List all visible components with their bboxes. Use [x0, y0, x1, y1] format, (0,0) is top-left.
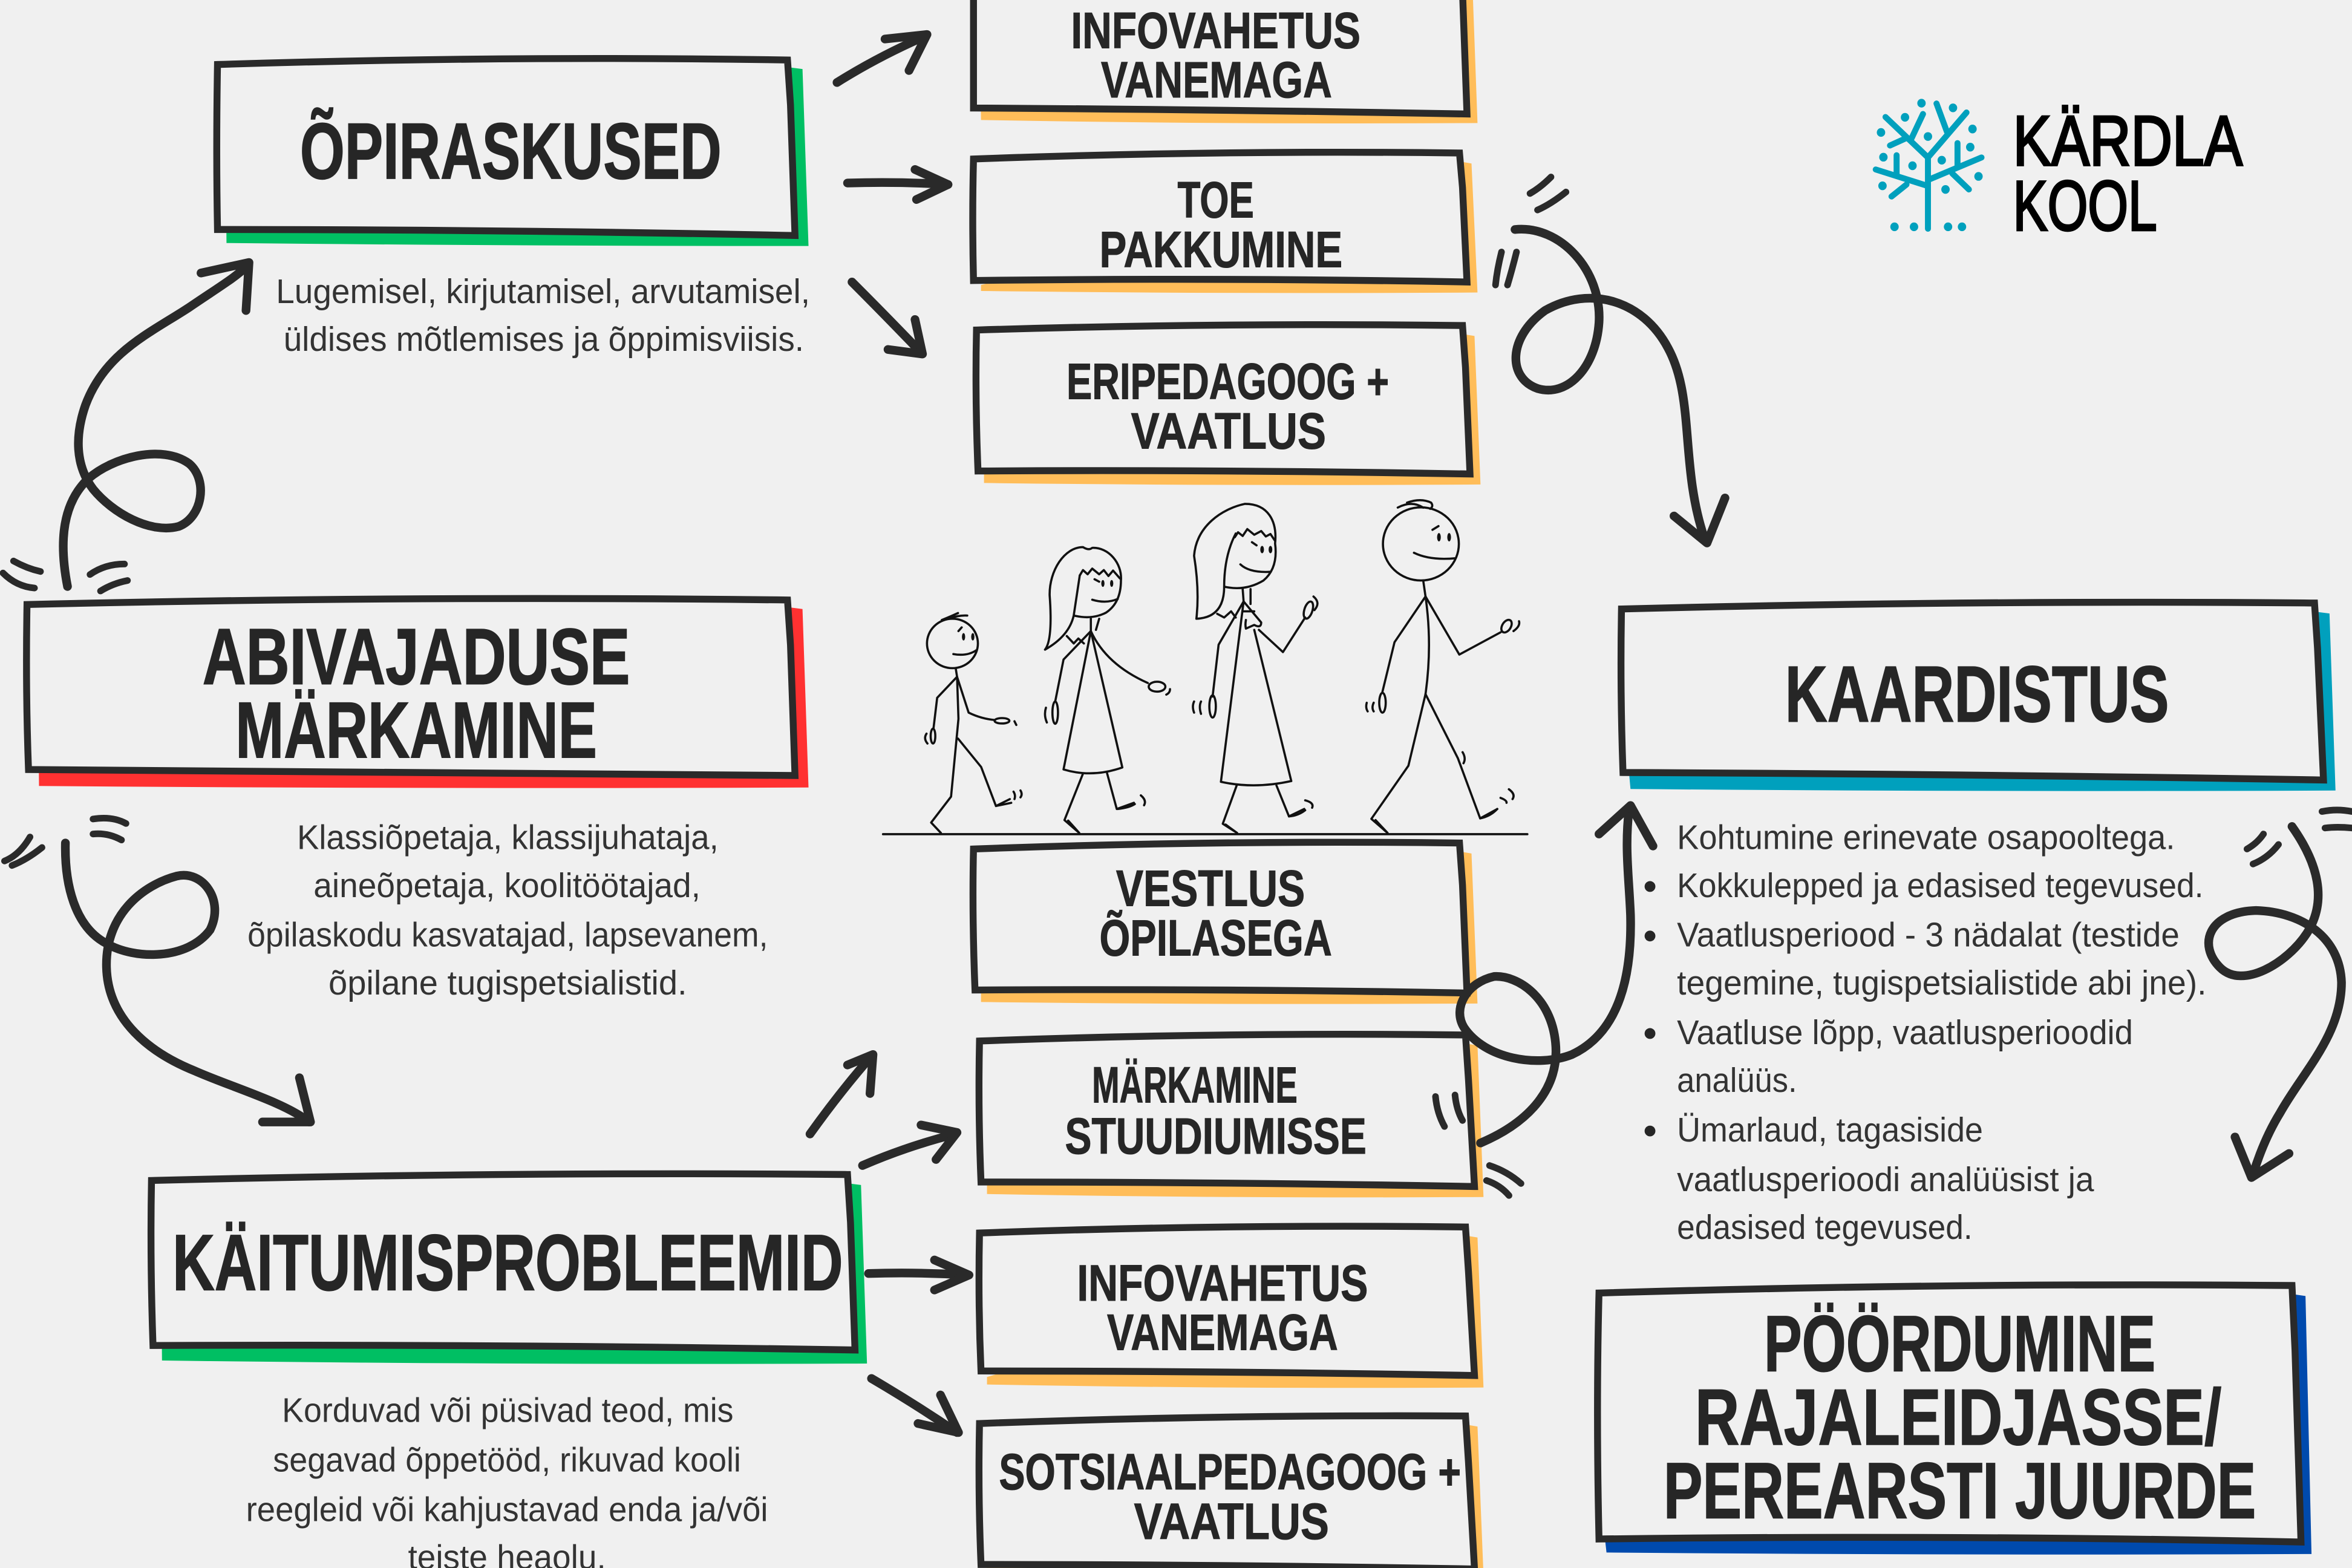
text: käitumisprobleemid description: Korduvad või püsivad teod, mis: [282, 1391, 734, 1430]
icon: motion ticks near kaardistus: [2247, 810, 2352, 864]
text: käitumisprobleemid description: [246, 1391, 768, 1568]
panel: käitumisprobleemid heading box: KÄITUMISPROBLEEMID: [172, 1218, 843, 1307]
text: who notices the need: õpilaskodu kasvatajad, lapsevanem,: [247, 916, 768, 955]
text: kaardistus bullet list: edasised tegevused.: [1677, 1208, 1973, 1247]
text: kaardistus bullet list: Vaatluse lõpp, vaatlusperioodid: [1677, 1013, 2133, 1052]
text: kaardistus bullet list: Vaatlusperiood - 3 nädalat (testide: [1677, 916, 2180, 955]
text: who notices the need: [247, 818, 768, 1002]
icon: motion ticks near toe pakkumine: [1495, 177, 1566, 285]
bullet: [1645, 930, 1655, 941]
panel: infovahetus vanemaga top box: VANEMAGA: [1101, 51, 1332, 108]
text: käitumisprobleemid description: reegleid või kahjustavad enda ja/või: [246, 1490, 768, 1529]
panel: märkamine stuudiumisse box: [979, 1034, 1483, 1197]
icon: teal tree: [1876, 99, 1983, 231]
text: who notices the need: Klassiõpetaja, klassijuhataja,: [297, 818, 719, 857]
text: who notices the need: aineõpetaja, koolitöötajad,: [313, 866, 701, 905]
arrow: to märkamine stuudiumisse: [863, 1125, 957, 1166]
panel: toe pakkumine box: PAKKUMINE: [1100, 221, 1342, 278]
arrow: abivajaduse to käitumisprobleemid: [65, 843, 310, 1122]
wordmark: KÄRDLA: [2013, 101, 2243, 180]
text: õpiraskused description: [276, 272, 810, 359]
arrow: abivajaduse to õpiraskused: [64, 263, 249, 587]
arrow: to infovahetus vanemaga lower: [869, 1260, 969, 1290]
arrow: toe pakkumine to kaardistus: [1515, 229, 1725, 543]
panel: infovahetus vanemaga lower box: [979, 1226, 1483, 1388]
figure: woman: [1193, 504, 1318, 833]
text: õpiraskused description: üldises mõtlemises ja õppimisviisis.: [284, 320, 804, 359]
panel: pöördumine heading box: [1598, 1285, 2311, 1555]
logo: Kärdla Kool: [1876, 99, 2243, 246]
panel: sotsiaalpedagoog + vaatlus box: SOTSIAALPEDAGOOG +: [999, 1443, 1461, 1500]
panel: infovahetus vanemaga top box: [973, 0, 1477, 123]
wordmark: KOOL: [2013, 166, 2157, 246]
ground line: [883, 833, 1527, 835]
panel: toe pakkumine box: TOE: [1177, 172, 1254, 229]
panel: sotsiaalpedagoog + vaatlus box: VAATLUS: [1134, 1493, 1329, 1550]
text: käitumisprobleemid description: segavad õppetööd, rikuvad kooli: [273, 1440, 741, 1479]
figure: man: [1366, 500, 1519, 833]
text: õpiraskused description: Lugemisel, kirjutamisel, arvutamisel,: [276, 272, 810, 311]
panel: vestlus õpilasega box: VESTLUS: [1116, 860, 1305, 917]
figure: girl: [1045, 547, 1170, 833]
illustration: stick figure family walking: [883, 500, 1527, 834]
panel: õpiraskused heading box: [217, 59, 808, 246]
panel: eripedagoog + vaatlus box: ERIPEDAGOOG +: [1067, 353, 1389, 410]
bullet: [1645, 1028, 1655, 1039]
text: kaardistus bullet list: vaatlusperioodi analüüsist ja: [1677, 1160, 2094, 1199]
arrow: kaardistus to pöördumine: [2209, 826, 2342, 1177]
panel: vestlus õpilasega box: [973, 842, 1477, 1004]
arrow: to sotsiaalpedagoog: [872, 1379, 958, 1432]
panel: abivajaduse märkamine heading box: MÄRKAMINE: [235, 685, 597, 774]
panel: kaardistus heading box: [1621, 603, 2336, 791]
panel: abivajaduse märkamine heading box: [27, 598, 808, 788]
panel: kaardistus heading box: KAARDISTUS: [1785, 650, 2169, 739]
panel: eripedagoog + vaatlus box: VAATLUS: [1131, 402, 1326, 459]
panel: märkamine stuudiumisse box: MÄRKAMINE: [1092, 1057, 1298, 1114]
text: kaardistus bullet list: Kohtumine erinevate osapooltega.: [1677, 818, 2175, 857]
text: kaardistus bullet list: tegemine, tugispetsialistide abi jne).: [1677, 964, 2206, 1002]
text: kaardistus bullet list: Kokkulepped ja edasised tegevused.: [1677, 866, 2204, 905]
panel: vestlus õpilasega box: ÕPILASEGA: [1100, 910, 1332, 967]
arrow: to eripedagoog: [852, 282, 923, 354]
panel: infovahetus vanemaga top box: INFOVAHETUS: [1071, 2, 1361, 59]
text: kaardistus bullet list: Ümarlaud, tagasiside: [1677, 1111, 1983, 1149]
icon: motion ticks below abivajaduse: [4, 818, 126, 866]
bullet: [1645, 1126, 1655, 1137]
panel: õpiraskused heading box: ÕPIRASKUSED: [300, 106, 722, 195]
figure: boy: [925, 613, 1022, 833]
text: kaardistus bullet list: analüüs.: [1677, 1061, 1797, 1100]
arrow: to vestlus õpilasega: [810, 1054, 873, 1134]
wordmark: [2013, 101, 2243, 246]
panel: abivajaduse märkamine heading box: ABIVAJADUSE: [203, 612, 630, 701]
panel: eripedagoog + vaatlus box: [976, 325, 1480, 485]
icon: motion ticks above abivajaduse left: [3, 561, 128, 591]
arrow: to toe pakkumine: [848, 169, 948, 200]
panel: infovahetus vanemaga lower box: VANEMAGA: [1107, 1304, 1338, 1361]
arrow: to infovahetus vanemaga top: [837, 34, 927, 82]
text: kaardistus bullet list: [1645, 818, 2206, 1247]
panel: märkamine stuudiumisse box: STUUDIUMISSE: [1065, 1108, 1367, 1165]
panel: infovahetus vanemaga lower box: INFOVAHETUS: [1077, 1255, 1368, 1312]
arrow: märkamine stuudiumisse to kaardistus: [1460, 806, 1653, 1143]
panel: pöördumine heading box: PÖÖRDUMINE: [1764, 1299, 2155, 1388]
text: who notices the need: õpilane tugispetsialistid.: [328, 964, 687, 1002]
bullet: [1645, 881, 1655, 892]
panel: sotsiaalpedagoog + vaatlus box: [979, 1416, 1483, 1568]
icon: motion ticks near märkamine stuudiumisse: [1436, 1095, 1521, 1195]
panel: käitumisprobleemid heading box: [151, 1174, 867, 1364]
panel: toe pakkumine box: [973, 152, 1477, 293]
